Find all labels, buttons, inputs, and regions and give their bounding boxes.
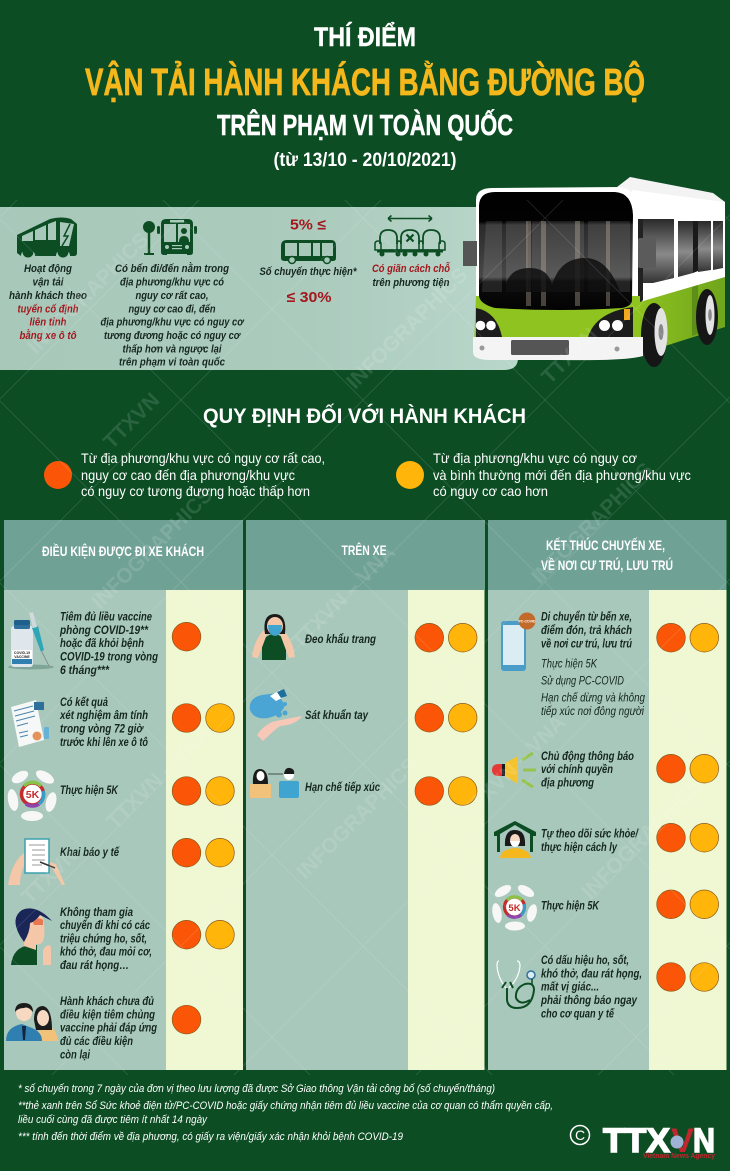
text: travel home: Hạn chế dừng và không xyxy=(541,691,645,705)
text: symptoms: khó thở, đau mỏi cơ, xyxy=(60,945,152,959)
icon: stethoscope xyxy=(497,961,535,1008)
text: travel home: Sử dụng PC-COVID xyxy=(541,674,624,688)
markers: orange and yellow xyxy=(657,823,719,852)
legend: yellow xyxy=(396,450,691,499)
markers: orange and yellow xyxy=(657,623,719,652)
icon: phone PC-COVID: PC-COVID xyxy=(518,620,536,624)
logo: TTXVN: TTX xyxy=(603,1122,670,1160)
panel: on the bus xyxy=(246,520,485,1070)
icon: vaccine: VACCINE xyxy=(14,655,30,659)
markers: orange and yellow xyxy=(415,703,477,732)
icon: phone PC-COVID xyxy=(501,612,536,671)
title: TRÊN PHẠM VI TOÀN QUỐC xyxy=(217,108,513,142)
text: notify authorities xyxy=(541,749,634,789)
icon: 5K: 5K xyxy=(508,903,521,914)
text: health declaration: Khai báo y tế xyxy=(60,845,120,859)
logo: TTXVN xyxy=(570,1122,715,1160)
icon: hand sanitizer xyxy=(250,689,302,741)
logo: TTXVN: V xyxy=(671,1122,694,1160)
watermark: INFOGRAPHICS xyxy=(342,263,472,394)
text: unvaccinated passengers: Hành khách chưa đủ xyxy=(60,994,155,1008)
icon: test result xyxy=(11,700,49,747)
legend: orange: nguy cơ cao đến địa phương/khu vực xyxy=(81,467,295,483)
heading: passenger rules: QUY ĐỊNH ĐỐI VỚI HÀNH KHÁCH xyxy=(203,404,526,428)
icon: 5K xyxy=(491,883,539,930)
text: route locations: tương đương hoặc có nguy cơ xyxy=(104,330,241,342)
watermark: INFOGRAPHICS xyxy=(87,483,217,614)
text: route locations xyxy=(100,262,245,369)
marker: orange xyxy=(172,622,201,651)
icon: mask xyxy=(252,614,295,660)
text: vaccine: 6 tháng*** xyxy=(60,663,110,677)
footnotes: liều cuối cùng đã được tiêm ít nhất 14 ngày xyxy=(18,1114,208,1126)
side windows xyxy=(643,219,674,283)
text: unvaccinated passengers: đủ các điều kiện xyxy=(60,1034,133,1048)
text: report symptoms: Có dấu hiệu ho, sốt, xyxy=(541,953,629,967)
text: fixed-route operation: vận tải xyxy=(32,276,64,288)
text: unvaccinated passengers: vaccine phải đáp ứng xyxy=(60,1021,158,1035)
text: unvaccinated passengers xyxy=(60,994,158,1061)
watermark: TTXVN – VNA xyxy=(102,721,215,834)
watermark: INFOGRAPHICS xyxy=(23,228,153,359)
text: travel home: Di chuyển từ bến xe, xyxy=(541,610,632,624)
text: seat distancing: Có giãn cách chỗ xyxy=(372,262,450,275)
title: (từ 13/10 - 20/10/2021) xyxy=(274,150,456,171)
text: trip percentage: 5% ≤ xyxy=(290,216,326,234)
panel: operating conditions xyxy=(0,207,518,370)
icon: home isolation xyxy=(494,821,536,858)
text: route locations: trên phạm vi toàn quốc xyxy=(119,357,225,369)
markers: orange and yellow xyxy=(657,890,719,919)
text: route locations: địa phương/khu vực có nguy cơ xyxy=(100,317,245,329)
watermark: TTXVN xyxy=(99,389,164,454)
icon: vaccine xyxy=(8,612,54,670)
markers: orange and yellow xyxy=(657,754,719,783)
text: seat distancing: trên phương tiện xyxy=(372,277,450,289)
text: report symptoms: phải thông báo ngay xyxy=(540,993,638,1007)
text: fixed-route operation: hành khách theo xyxy=(9,290,87,302)
text: trip percentage xyxy=(260,216,357,306)
text: trip percentage: Số chuyến thực hiện* xyxy=(260,266,357,278)
legend: orange xyxy=(44,450,325,499)
text: notify authorities: địa phương xyxy=(541,775,595,789)
text: unvaccinated passengers: điều kiện tiêm chủng xyxy=(60,1007,156,1021)
column heading: ĐIỀU KIỆN ĐƯỢC ĐI XE KHÁCH xyxy=(42,542,204,559)
icon: small bus xyxy=(281,240,336,264)
text: fixed-route operation: Hoạt động xyxy=(24,263,72,275)
text: trip percentage: ≤ 30% xyxy=(286,289,332,306)
text: test result: trước khi lên xe ô tô xyxy=(60,735,148,749)
text: fixed-route operation: tuyến cố định xyxy=(18,303,79,315)
footnotes: **thẻ xanh trên Sổ Sức khoẻ điện tử/PC-COVID hoặc giấy chứng nhận tiêm đủ liều vaccine của cơ quan có thẩm quyền cấp, xyxy=(18,1100,553,1112)
text: fixed-route operation: bằng xe ô tô xyxy=(20,329,77,342)
watermark: INFOGRAPHICS xyxy=(577,773,707,904)
column heading: TRÊN XE xyxy=(342,541,386,558)
markers: orange and yellow xyxy=(415,623,477,652)
icon: passengers xyxy=(6,1003,58,1041)
text: 5K: Thực hiện 5K xyxy=(541,898,600,912)
text: 5K: Thực hiện 5K xyxy=(60,783,119,797)
panel: boarding conditions xyxy=(4,520,243,1070)
text: unvaccinated passengers: còn lại xyxy=(60,1047,91,1061)
text: report symptoms xyxy=(540,953,642,1020)
bus side lower xyxy=(633,277,725,353)
text: route locations: địa phương/khu vực có xyxy=(120,276,224,288)
text: test result: Có kết quả xyxy=(60,695,108,709)
watermark: TTXVN – VNA xyxy=(287,541,400,654)
text: route locations: nguy cơ rất cao, xyxy=(136,290,208,302)
illustration: green bus xyxy=(463,177,725,367)
icon: 5K: 5K xyxy=(26,789,40,801)
text: vaccine: phòng COVID-19** xyxy=(59,623,149,637)
text: self monitoring: Tự theo dõi sức khỏe/ xyxy=(541,826,639,840)
legend: yellow: và bình thường mới đến địa phương/khu vực xyxy=(433,467,691,483)
bumper xyxy=(473,337,643,360)
legend: yellow: có nguy cơ cao hơn xyxy=(433,483,548,499)
watermark: INFOGRAPHICS xyxy=(292,753,422,884)
markers: orange and yellow xyxy=(415,777,477,805)
icon: megaphone xyxy=(492,753,536,787)
text: fixed-route operation xyxy=(9,263,87,342)
markers: orange and yellow xyxy=(172,777,234,805)
icon: 5K xyxy=(6,768,58,821)
text: notify authorities: Chủ động thông báo xyxy=(541,749,634,763)
text: mask: Đeo khẩu trang xyxy=(305,632,377,646)
text: route locations: nguy cơ cao đi, đến xyxy=(128,303,216,315)
icon: health declaration xyxy=(8,839,65,885)
legend: yellow: Từ địa phương/khu vực có nguy cơ xyxy=(433,450,637,466)
text: travel home: Thực hiện 5K xyxy=(541,656,598,670)
text: vaccine: Tiêm đủ liều vaccine xyxy=(60,610,152,624)
text: test result xyxy=(59,695,148,749)
markers: orange and yellow xyxy=(172,838,234,867)
bus side upper xyxy=(632,190,725,304)
text: self monitoring xyxy=(541,826,639,854)
footnotes xyxy=(18,1083,553,1143)
text: notify authorities: với chính quyền xyxy=(541,762,613,776)
text: travel home: về nơi cư trú, lưu trú xyxy=(541,636,633,650)
text: report symptoms: khó thở, đau rát họng, xyxy=(541,966,642,980)
text: fixed-route operation: liên tỉnh xyxy=(30,317,67,329)
marker: orange xyxy=(172,1005,201,1034)
text: test result: xét nghiệm âm tính xyxy=(59,708,148,722)
logo: TTXVN: N xyxy=(693,1122,715,1160)
icon: coughing man xyxy=(11,908,52,965)
text: report symptoms: mất vị giác... xyxy=(541,980,599,994)
watermark: TTXVN – VNA xyxy=(457,711,570,824)
text: limit contact: Hạn chế tiếp xúc xyxy=(305,780,380,794)
text: route locations: thấp hơn và ngược lại xyxy=(122,343,222,355)
logo: TTXVN: Vietnam News Agency xyxy=(643,1153,715,1160)
icon: vaccine: COVID-19 xyxy=(14,651,30,655)
legend: orange: có nguy cơ tương đương hoặc thấp hơn xyxy=(81,483,310,499)
text: vaccine: hoặc đã khỏi bệnh xyxy=(60,636,144,650)
markers: orange and yellow xyxy=(657,963,719,991)
text: seat distancing xyxy=(372,262,450,289)
text: travel home: tiếp xúc nơi đông người xyxy=(541,704,644,718)
front frame xyxy=(476,187,638,345)
text: sanitize: Sát khuẩn tay xyxy=(305,708,369,722)
text: travel home: điểm đón, trả khách xyxy=(541,623,632,637)
panel: end of trip xyxy=(488,520,726,1070)
markers: orange and yellow xyxy=(172,920,234,949)
watermark: INFOGRAPHICS xyxy=(527,458,657,589)
footnotes: * số chuyến trong 7 ngày của đơn vị theo lưu lượng đã được Sở Giao thông Vận tải công bố (số chuyến/tháng) xyxy=(18,1083,495,1095)
text: report symptoms: cho cơ quan y tế xyxy=(541,1006,615,1020)
mirrors xyxy=(463,241,477,266)
text: vaccine: COVID-19 trong vòng xyxy=(60,650,159,664)
icon: bus stop and bus xyxy=(143,219,197,255)
column heading: VỀ NƠI CƯ TRÚ, LƯU TRÚ xyxy=(541,556,673,573)
watermark: TTXVN xyxy=(17,844,82,909)
icon: intercity bus xyxy=(17,218,77,258)
markers: orange and yellow xyxy=(172,704,234,732)
logo: TTXVN: C xyxy=(575,1127,585,1143)
text: test result: trong vòng 72 giờ xyxy=(60,722,145,736)
title xyxy=(85,21,645,171)
text: route locations: Có bến đi/đến nằm trong xyxy=(115,262,229,275)
text: symptoms: Không tham gia xyxy=(60,905,133,919)
column heading: KẾT THÚC CHUYẾN XE, xyxy=(546,536,665,553)
watermark xyxy=(0,200,730,1075)
legend: orange: Từ địa phương/khu vực có nguy cơ rất cao, xyxy=(81,450,325,466)
icon: seat spacing xyxy=(375,216,445,256)
text: symptoms: chuyến đi khi có các xyxy=(60,918,150,932)
text: vaccine xyxy=(59,610,159,677)
headlights xyxy=(476,308,502,337)
text: symptoms: triệu chứng ho, sốt, xyxy=(60,931,147,945)
front green xyxy=(474,296,640,345)
windshield xyxy=(479,192,633,310)
text: travel home xyxy=(541,610,645,718)
text: symptoms: đau rát họng… xyxy=(60,958,129,972)
wheels xyxy=(641,303,667,367)
watermark: TTXVN xyxy=(537,324,602,389)
rear wheels and roof xyxy=(617,177,725,240)
title: THÍ ĐIỂM xyxy=(314,21,416,52)
column heading xyxy=(541,536,673,573)
icon: limit contact xyxy=(250,768,299,798)
footnotes: *** tính đến thời điểm về địa phương, có giấy ra viện/giấy xác nhận khỏi bệnh COVID-19 xyxy=(18,1131,403,1143)
text: self monitoring: thực hiện cách ly xyxy=(541,840,618,854)
text: symptoms xyxy=(60,905,152,972)
